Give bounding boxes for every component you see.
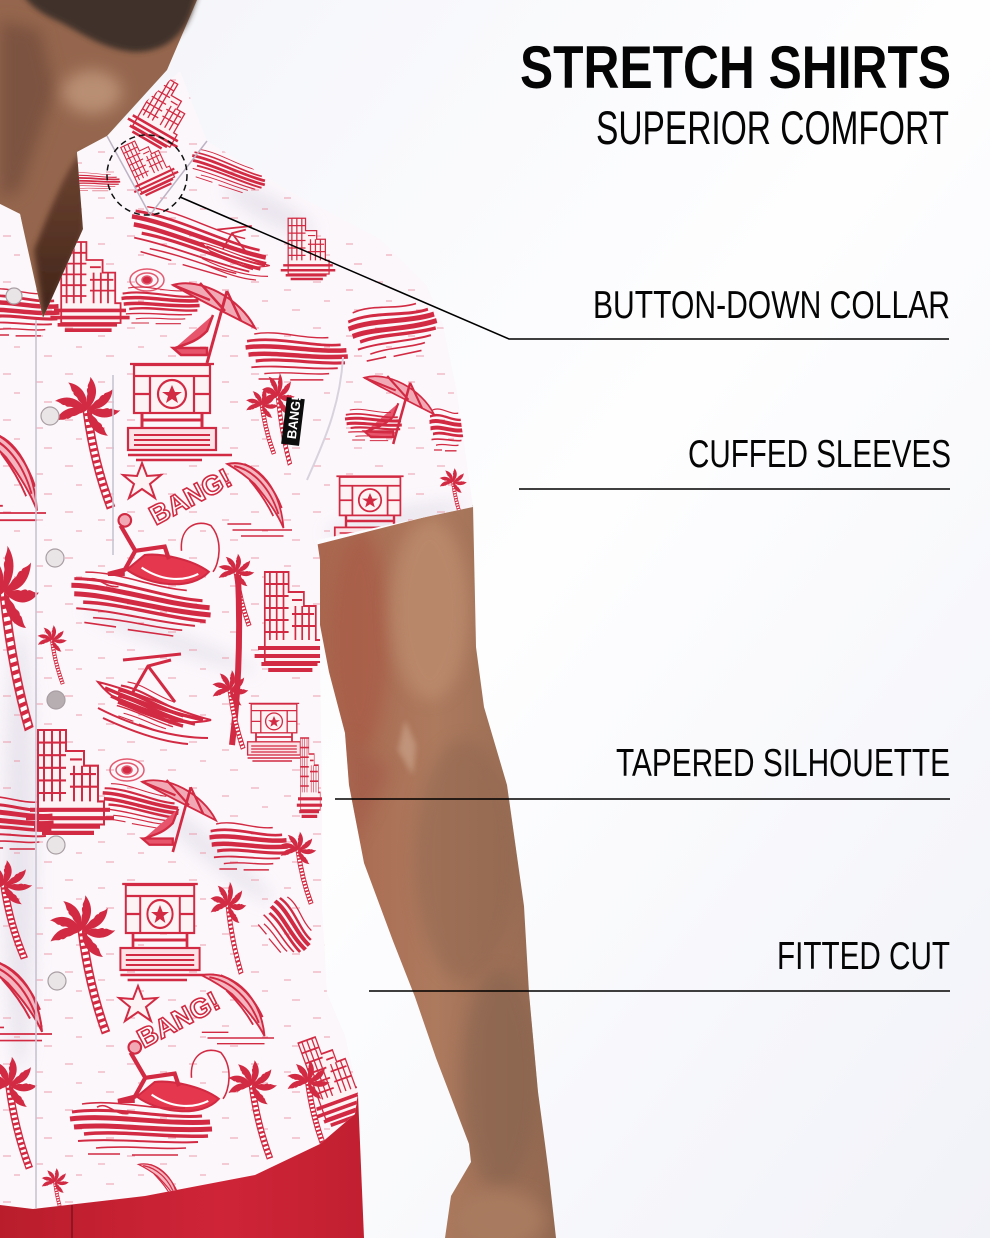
- sleeve seam: [307, 357, 343, 480]
- model: beard stubble: [18, 0, 200, 52]
- woven label: BANG!: [284, 396, 304, 440]
- shirt placket and pocket seams: [36, 320, 113, 1208]
- model: arm and hand: [318, 505, 556, 1238]
- collar highlight circle: [107, 135, 187, 215]
- shirt with toile print: [0, 0, 480, 1238]
- shirt fabric: [0, 134, 473, 1209]
- fabric shading: [4, 176, 466, 1070]
- print lettering: BANG!: [144, 463, 237, 531]
- model: neck and chest: [0, 0, 197, 330]
- collar edge: [107, 136, 207, 215]
- leader line: collar: [180, 197, 949, 339]
- red shorts: [0, 1095, 364, 1238]
- leader line: tapered silhouette: [335, 798, 950, 800]
- shirt buttons: [6, 288, 66, 990]
- shirt print motifs: [0, 71, 467, 1223]
- leader line: fitted cut: [369, 990, 950, 992]
- fine print specks: [3, 80, 454, 1202]
- print lettering lower: BANG!: [132, 986, 225, 1054]
- leader line: cuffed sleeves: [519, 488, 950, 490]
